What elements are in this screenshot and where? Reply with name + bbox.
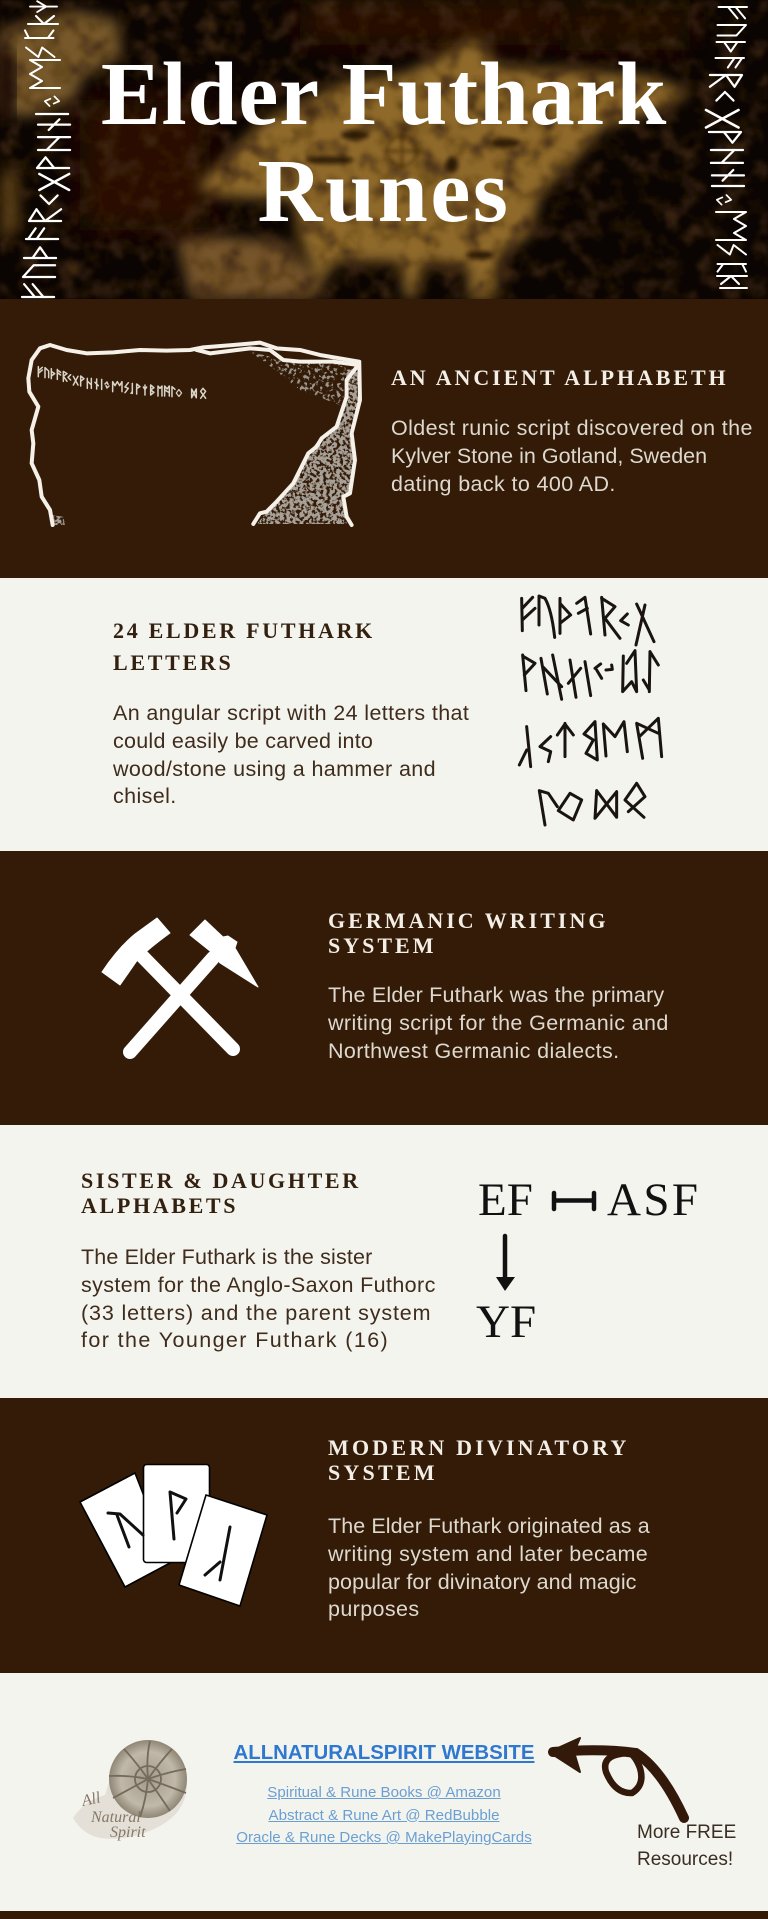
- heading: SYSTEM: [328, 933, 436, 958]
- left rune strip: [20, 0, 72, 298]
- link list: Oracle & Rune Decks @ MakePlayingCards: [236, 1829, 532, 1846]
- diagram: alphabet relations: ASF: [607, 1174, 698, 1226]
- body text: Oldest runic script discovered on the: [391, 416, 753, 440]
- body text: The Elder Futhark originated as a: [328, 1514, 650, 1538]
- body text: wood/stone using a hammer and: [113, 757, 436, 781]
- body text: popular for divinatory and magic: [328, 1570, 637, 1594]
- heading: SYSTEM: [328, 1460, 438, 1485]
- heading: AN ANCIENT ALPHABETH: [391, 365, 729, 390]
- body text: [328, 1514, 650, 1621]
- body text: Kylver Stone in Gotland, Sweden: [391, 444, 707, 468]
- heading: GERMANIC WRITING: [328, 908, 608, 933]
- icon: nautilus shell logo: Spirit: [110, 1824, 146, 1841]
- more free resources note: More FREE: [637, 1822, 736, 1843]
- icon: Kylver Stone: [26, 340, 362, 528]
- body text: could easily be carved into: [113, 729, 373, 753]
- right rune strip: [704, 6, 748, 289]
- heading: [328, 1435, 630, 1485]
- heading: [113, 618, 375, 675]
- body text: for the Younger Futhark (16): [81, 1328, 389, 1352]
- title: Elder Futhark: [101, 45, 667, 144]
- panel: sister and daughter alphabets: [0, 1125, 768, 1398]
- body text: The Elder Futhark is the sister: [81, 1245, 372, 1269]
- body text: chisel.: [113, 784, 177, 808]
- link list: [236, 1784, 532, 1846]
- diagram: alphabet relations: EF: [478, 1174, 533, 1226]
- body text: writing system and later became: [328, 1542, 648, 1566]
- heading: [81, 1168, 361, 1218]
- body text: [81, 1245, 436, 1352]
- map dark details: [306, 130, 519, 259]
- arrow: [548, 1737, 689, 1823]
- heading: ALPHABETS: [81, 1193, 238, 1218]
- rune inscription: [38, 367, 206, 398]
- body text: system for the Anglo-Saxon Futhorc: [81, 1273, 436, 1297]
- link list: Abstract & Rune Art @ RedBubble: [269, 1806, 499, 1824]
- panel: footer resources: [0, 1673, 768, 1911]
- panel: 24 elder futhark letters: [0, 578, 768, 851]
- heading: SISTER & DAUGHTER: [81, 1168, 361, 1193]
- diagram: alphabet relations: YF: [476, 1296, 536, 1348]
- diagram: alphabet relations: [476, 1174, 698, 1348]
- title: Runes: [257, 142, 511, 241]
- icon: nautilus shell logo: All: [79, 1789, 103, 1810]
- icon: rune cards: [79, 1464, 268, 1607]
- icon: nautilus shell logo: Natural: [90, 1809, 141, 1826]
- body text: [328, 983, 669, 1063]
- link list: Spiritual & Rune Books @ Amazon: [267, 1784, 501, 1801]
- panel: an ancient alphabet: [0, 299, 768, 578]
- panel: germanic writing system: [0, 851, 768, 1125]
- title: [101, 45, 667, 241]
- panel: modern divinatory system: [0, 1398, 768, 1673]
- body text: writing script for the Germanic and: [328, 1011, 669, 1035]
- more free resources note: Resources!: [637, 1849, 733, 1870]
- heading: MODERN DIVINATORY: [328, 1435, 630, 1460]
- body text: dating back to 400 AD.: [391, 472, 616, 496]
- body text: [113, 701, 469, 808]
- body text: [391, 416, 753, 496]
- icon: nautilus shell logo: [73, 1740, 187, 1841]
- heading: LETTERS: [113, 650, 233, 675]
- heading: [328, 908, 608, 958]
- body text: (33 letters) and the parent system: [81, 1301, 431, 1325]
- bottom strip: [0, 1911, 768, 1919]
- header banner: [0, 0, 768, 299]
- icon: 24 runes: [518, 594, 664, 826]
- compass rose: [383, 132, 421, 170]
- icon: crossed hammers: [102, 918, 258, 1059]
- website heading: ALLNATURALSPIRIT WEBSITE: [234, 1742, 534, 1764]
- heading: 24 ELDER FUTHARK: [113, 618, 375, 643]
- body text: An angular script with 24 letters that: [113, 701, 469, 725]
- body text: purposes: [328, 1597, 420, 1621]
- body text: The Elder Futhark was the primary: [328, 983, 664, 1007]
- body text: Northwest Germanic dialects.: [328, 1039, 619, 1063]
- more free resources note: [637, 1822, 736, 1870]
- map background: [0, 0, 768, 299]
